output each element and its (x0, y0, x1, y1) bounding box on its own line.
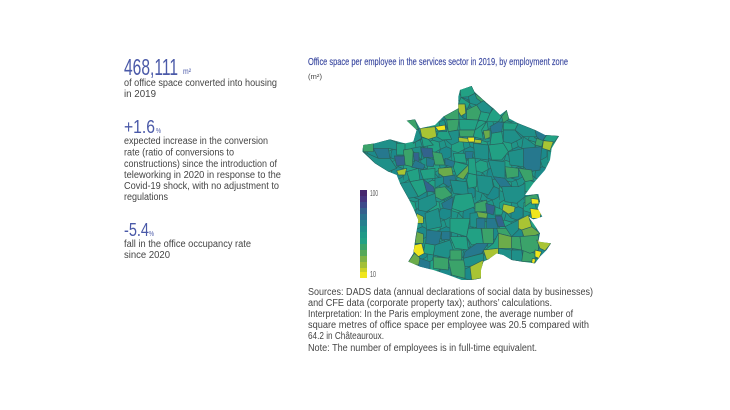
map title: Office space per employee in the services sector in 2019, by employment zone (308, 56, 568, 68)
text: expected increase: expected increase in the conversion (124, 136, 268, 147)
map unit: (m²) (308, 72, 323, 81)
text: expected increase: rate (ratio of conversions to (124, 148, 234, 158)
sources and notes: Sources: DADS data (annual declarations of social data by businesses) (308, 287, 593, 298)
text: office occupancy fall: fall in the office occupancy rate (124, 239, 251, 250)
text: office space converted: of office space converted into housing (124, 78, 277, 89)
stat: 468,111 m2: m² (183, 67, 191, 76)
text: office space converted: in 2019 (124, 89, 156, 100)
sources and notes: square metres of office space per employee was 20.5 compared with (308, 320, 589, 331)
text: office occupancy fall (124, 239, 251, 261)
text: expected increase: constructions) since the introduction of (124, 159, 277, 170)
legend colour scale: 10 (370, 270, 376, 279)
stat: -5.4%: % (149, 231, 154, 238)
stat: -5.4%: -5.4 (124, 220, 149, 240)
stat: +1.6%: % (156, 128, 161, 135)
text: expected increase: Covid-19 shock, with no adjustment to (124, 181, 279, 192)
sources and notes: 64.2 in Châteauroux. (308, 331, 384, 342)
text: expected increase: regulations (124, 192, 168, 203)
legend colour scale (360, 189, 378, 279)
text: expected increase (124, 136, 281, 203)
text: office occupancy fall: since 2020 (124, 250, 170, 261)
sources and notes: and CFE data (corporate property tax); authors’ calculations. (308, 298, 552, 309)
legend colour scale: 100 (370, 189, 378, 198)
stat: 468,111 m2: 468,111 (124, 54, 178, 80)
text: expected increase: teleworking in 2020 in response to the (124, 170, 281, 181)
stat: +1.6%: +1.6 (124, 117, 155, 137)
text: office space converted (124, 78, 277, 100)
sources and notes (308, 287, 593, 354)
map of France by employment zone (362, 86, 559, 280)
sources and notes: Note: The number of employees is in full-time equivalent. (308, 343, 537, 354)
sources and notes: Interpretation: In the Paris employment zone, the average number of (308, 309, 573, 320)
